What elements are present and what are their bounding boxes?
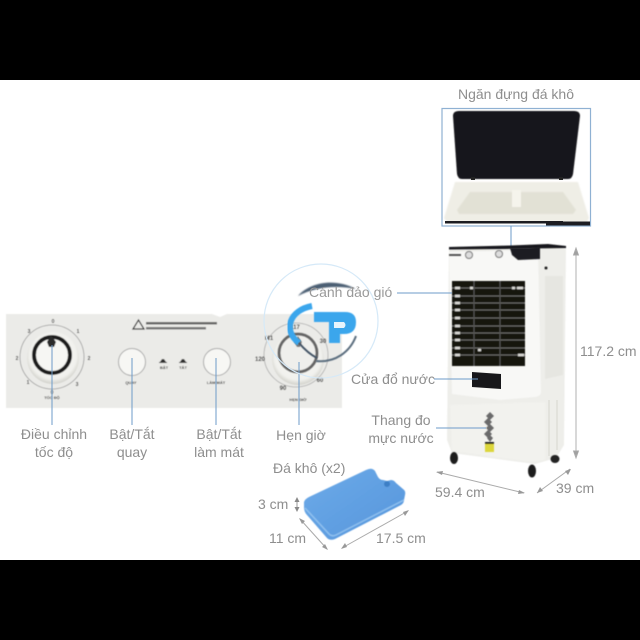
timer dial: HẸN GIỜ: [289, 397, 307, 402]
swing button: QUAY: [125, 380, 137, 385]
speed dial: 0: [51, 390, 54, 396]
speed dial: 1: [77, 329, 80, 335]
callout: water gauge: mực nước: [368, 430, 434, 446]
timer dial: 120: [255, 357, 266, 363]
on off indicators: TẮT: [179, 365, 187, 370]
dimension: ice pack thickness: 3 cm: [258, 496, 288, 512]
speed dial: TỐC ĐỘ: [44, 395, 60, 400]
callout: water gauge: Thang đo: [371, 412, 431, 428]
swing button: [118, 348, 146, 385]
callout: fan blades: Cánh đảo gió: [309, 284, 393, 300]
speed dial: 0: [52, 319, 55, 325]
panel: ice compartment photo: [442, 108, 590, 226]
label: speed control: tốc độ: [35, 444, 73, 460]
dimension: ice pack width: 11 cm: [269, 530, 306, 546]
dimension: depth: 39 cm: [556, 480, 594, 496]
callout: water door: Cửa đổ nước: [351, 371, 435, 387]
label: timer: Hẹn giờ: [276, 427, 326, 443]
cooling button: [204, 348, 230, 385]
top black bar: [0, 0, 640, 80]
lid: [453, 111, 580, 179]
label: ice packs: Đá khô (x2): [273, 460, 345, 476]
label: cooling: làm mát: [194, 444, 244, 460]
timer dial: 60: [317, 378, 324, 384]
side panel: [545, 276, 563, 379]
watermark logo: [264, 264, 378, 378]
timer dial: 30: [320, 339, 327, 345]
icon: blue ice pack: [304, 469, 405, 540]
dimension: ice pack width: [269, 518, 328, 550]
on off indicators: BẬT: [160, 365, 169, 370]
speed dial: [16, 319, 91, 400]
bottom black bar: [0, 560, 640, 640]
dimension: width: 59.4 cm: [435, 484, 485, 500]
body: [447, 246, 566, 464]
label: speed control: Điều chỉnh: [21, 426, 87, 442]
ice tray: [444, 182, 589, 222]
timer dial: [255, 323, 328, 402]
cooling button: LÀM MÁT: [207, 380, 226, 385]
top cap: [449, 244, 566, 250]
dimension: height: 117.2 cm: [580, 343, 637, 359]
dimension: ice pack length: [341, 510, 426, 549]
water inlet door: [472, 372, 501, 389]
panel: control panel: [6, 314, 342, 408]
brand and control knobs: [449, 250, 548, 270]
connector line: [510, 226, 512, 246]
dimension: ice pack length: 17.5 cm: [376, 530, 426, 546]
speed dial: 1: [27, 380, 30, 386]
upper front: [449, 250, 541, 400]
timer dial: 90: [280, 386, 287, 392]
label: swing: Bật/Tắt: [109, 426, 155, 442]
lower tank panels: [450, 402, 545, 462]
label: cooling: Bật/Tắt: [196, 426, 242, 442]
label: swing: quay: [117, 444, 147, 460]
water level gauge: [484, 412, 494, 452]
timer dial: M1: [265, 336, 274, 342]
air cooler: [447, 244, 566, 478]
callout lines: control panel: [52, 345, 299, 425]
dimension: depth: [537, 469, 594, 496]
callout: water gauge: [368, 412, 486, 446]
speed dial: 2: [88, 356, 91, 362]
dimension: width: [435, 471, 525, 500]
air vent louvers: [452, 281, 525, 366]
tray base: [445, 221, 590, 226]
label: dry ice compartment: Ngăn đựng đá khô: [458, 86, 574, 102]
icon: warning triangle: [133, 320, 217, 330]
timer dial: 117: [290, 325, 300, 331]
dimension: height: [574, 248, 637, 458]
speed dial: 3: [28, 329, 31, 335]
speed dial: 3: [76, 382, 79, 388]
speed dial: 2: [16, 356, 19, 362]
callout: water door: [351, 371, 478, 387]
lid hinges: [471, 177, 563, 180]
on off indicators: [159, 359, 187, 370]
casters: [450, 452, 560, 478]
